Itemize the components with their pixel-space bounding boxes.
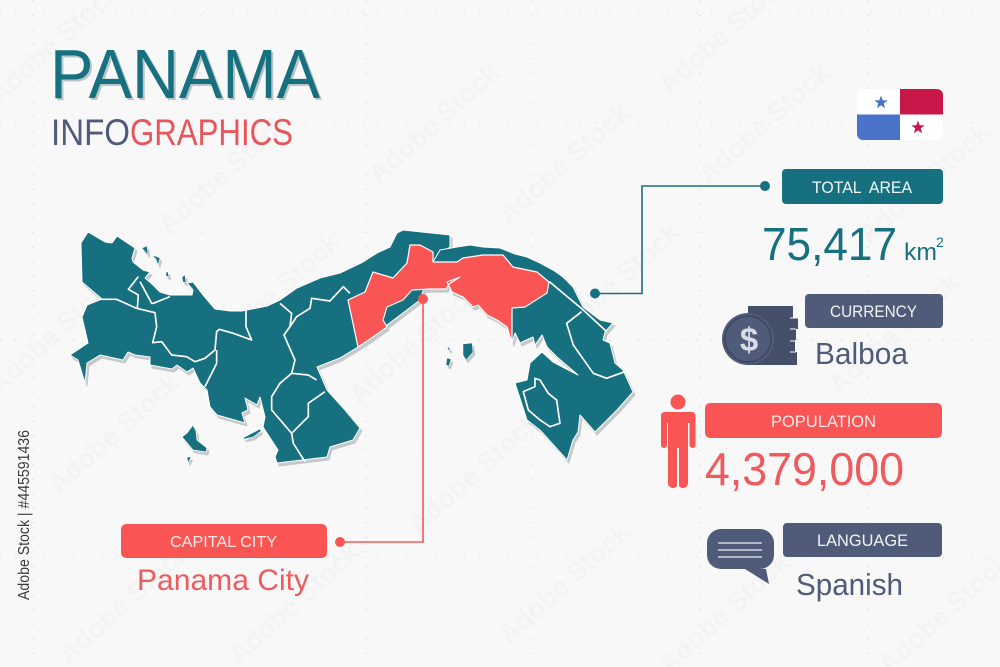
label: population: POPULATION <box>771 412 876 431</box>
label: population <box>705 403 942 438</box>
icon: small western islands <box>142 246 261 463</box>
value: total area: 75,417 <box>762 218 897 270</box>
value: currency: Balboa <box>815 336 909 371</box>
title: Panama: PANAMA <box>50 35 320 113</box>
icon: Pearl islands <box>446 343 473 366</box>
title: Panama: PANAMA <box>52 37 322 115</box>
map of Panama <box>70 230 633 463</box>
icon: coin stack <box>722 306 798 365</box>
value: total area: 2 <box>936 234 944 250</box>
label: total area <box>782 169 943 204</box>
subtitle: Infographics <box>51 112 293 153</box>
panel: total area <box>762 169 944 270</box>
value: capital city: Panama City <box>137 564 309 597</box>
icon: person <box>661 394 696 488</box>
subtitle: Infographics: GRAPHICS <box>130 112 293 153</box>
subtitle: Infographics: INFO <box>51 112 130 153</box>
infographic canvas: Adobe Stock <box>53 536 196 667</box>
label: currency: CURRENCY <box>830 302 917 321</box>
icon: speech bubble <box>707 529 774 584</box>
value: language: Spanish <box>796 567 903 602</box>
infographic canvas: Adobe Stock <box>223 536 366 667</box>
infographic canvas: Adobe Stock <box>493 96 636 230</box>
infographic canvas: Adobe Stock <box>693 56 836 190</box>
infographic canvas: Adobe Stock <box>493 516 636 650</box>
label: language: LANGUAGE <box>817 531 908 550</box>
infographic canvas: Adobe Stock <box>823 266 966 400</box>
callout: capital city leader line <box>335 294 428 547</box>
region: western provinces <box>70 230 450 463</box>
infographic canvas: Adobe Stock <box>153 106 296 240</box>
region: eastern provinces <box>433 245 633 460</box>
panel: capital city <box>121 524 327 597</box>
panel: currency <box>722 294 943 371</box>
infographic canvas: Adobe Stock <box>363 56 506 190</box>
infographic canvas: Adobe Stock <box>403 406 546 540</box>
label: capital city: CAPITAL CITY <box>170 534 277 551</box>
infographic canvas: Adobe Stock <box>43 366 186 500</box>
value: population: 4,379,000 <box>705 443 904 495</box>
region: highlighted capital province <box>348 245 549 347</box>
infographic canvas: Adobe Stock <box>853 116 996 250</box>
infographic canvas: Adobe Stock <box>203 226 346 360</box>
label: language <box>783 523 942 557</box>
stock credit text: Adobe Stock | #445591436 <box>16 430 33 600</box>
panel: language <box>707 523 942 602</box>
label: capital city <box>121 524 327 558</box>
panel: population <box>661 394 942 495</box>
infographic canvas: Adobe Stock <box>343 276 486 410</box>
label: total area: TOTAL AREA <box>812 178 913 197</box>
value: total area: km <box>904 239 937 266</box>
infographic canvas: Adobe Stock <box>543 216 686 350</box>
label: currency <box>805 294 943 328</box>
icon: Coiba island <box>182 425 207 452</box>
callout: total area leader line <box>590 181 770 298</box>
icon: flag of Panama <box>857 89 943 140</box>
icon: coin stack: $ <box>740 321 758 358</box>
